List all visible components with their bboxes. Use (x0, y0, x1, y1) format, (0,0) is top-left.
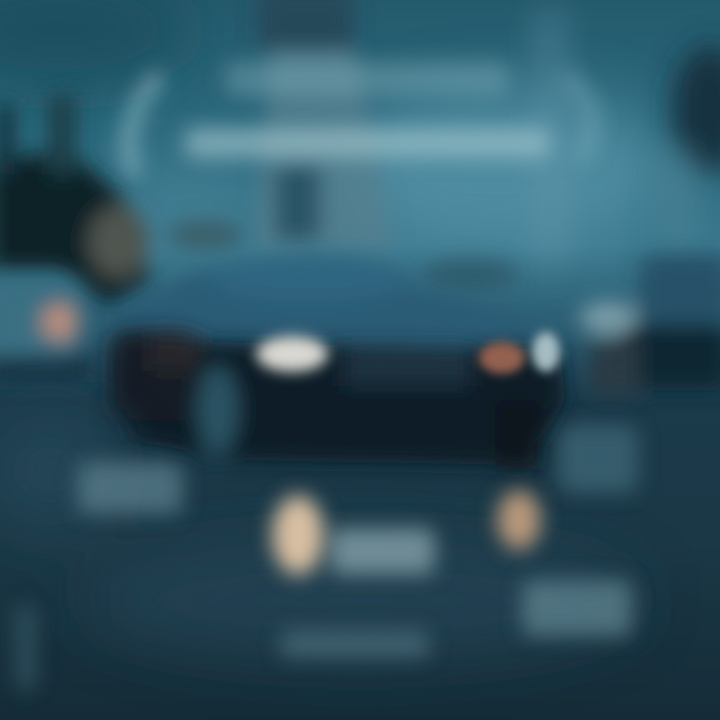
car roof and hood (115, 258, 560, 350)
ghost headline in sky (129, 62, 592, 175)
left car (0, 278, 90, 382)
tower (255, 0, 395, 250)
main car (110, 258, 565, 470)
sky glow (0, 0, 670, 260)
headlight white (256, 336, 328, 372)
right cars (420, 255, 720, 395)
reflection blobs (16, 425, 638, 690)
tail light orange (479, 342, 525, 374)
orange light reflections (272, 490, 541, 575)
car body (110, 330, 565, 470)
left trees (0, 95, 243, 305)
headlight right (532, 332, 560, 372)
right tree (660, 45, 720, 250)
road sheen (0, 410, 640, 660)
right pylon (530, 10, 570, 260)
